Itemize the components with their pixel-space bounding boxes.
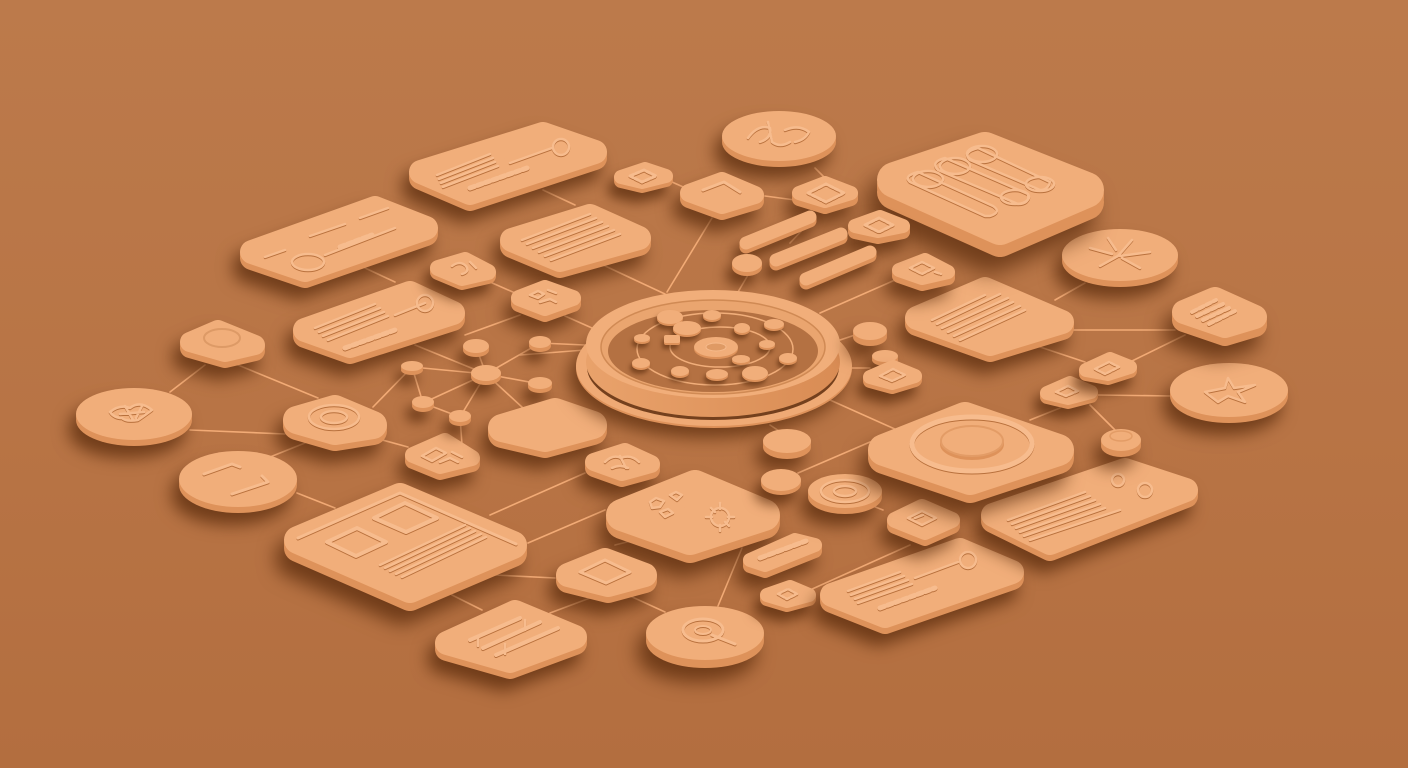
- outer ring: [576, 306, 852, 426]
- node: [529, 336, 551, 348]
- disc: below hub: [763, 429, 811, 453]
- blank rounded tile: [502, 412, 593, 438]
- card: sliders: [447, 612, 575, 661]
- tile: right pattern: [1184, 299, 1255, 326]
- small tile: near network: [413, 441, 472, 466]
- disc: right of hub 1: [853, 322, 887, 340]
- big tile: sliders: [895, 146, 1086, 227]
- small tile: bottom: [767, 587, 809, 601]
- small tile: right 2: [1086, 359, 1130, 374]
- circle tile: top: [722, 111, 836, 161]
- card: top centre: [421, 134, 595, 193]
- connector lines: [170, 168, 1185, 613]
- small tile: below blank: [594, 452, 651, 472]
- ring gap: [587, 314, 839, 420]
- main ring top: [586, 290, 840, 398]
- node: [401, 361, 423, 371]
- small tile: frame: [568, 560, 645, 585]
- card: lined right: [917, 289, 1062, 344]
- small tile: top pattern: [855, 217, 903, 232]
- hub centre: [694, 337, 738, 357]
- small tile: 1: [438, 260, 488, 278]
- small tile: right of bars: [899, 260, 948, 278]
- circle tile: at sign: [646, 606, 764, 660]
- bar 2: [776, 234, 841, 260]
- small tile: right 1: [1047, 383, 1091, 398]
- inner lip: [601, 300, 825, 394]
- big panel: squares and lines: [298, 493, 516, 589]
- disc: below hub small: [761, 469, 801, 491]
- node: [449, 410, 471, 422]
- disc: target: [808, 474, 882, 508]
- card: bottom right: [832, 550, 1012, 616]
- small tile: right of hub: [870, 367, 915, 383]
- small tile: top left of square: [621, 169, 666, 182]
- tile: concentric rings: [884, 417, 1058, 479]
- small tile: square: [895, 507, 952, 532]
- network: small nodes: [401, 336, 552, 422]
- bar 3: [806, 252, 870, 279]
- card: lined panel: [512, 214, 639, 260]
- node: [471, 365, 501, 381]
- knob: [1101, 429, 1141, 451]
- small tile: lozenge: [750, 540, 815, 565]
- circle tile: right upper: [1062, 229, 1178, 281]
- main ring side: [586, 307, 840, 417]
- card: upper left: [252, 208, 426, 270]
- circle tile: far left: [76, 388, 192, 440]
- small disc: top centre: [732, 254, 762, 272]
- circle tile: bracket: [179, 451, 297, 507]
- small tile: top left knob: [190, 329, 255, 352]
- node: [412, 396, 434, 408]
- card: lower right: [993, 470, 1186, 543]
- small tile: 2: [519, 288, 573, 308]
- central hub: [576, 290, 852, 426]
- node: [528, 377, 552, 389]
- node: [463, 339, 489, 353]
- bar 1: [746, 217, 810, 243]
- orbits: [637, 313, 793, 385]
- rounded tile: concentric: [297, 405, 373, 431]
- circle tile: far right: [1170, 363, 1288, 417]
- tile: square outline: [689, 181, 755, 205]
- tile: gears: [622, 486, 764, 539]
- floor nodes: [632, 310, 797, 380]
- small tile: under top circle: [799, 183, 851, 202]
- card: left middle: [305, 293, 453, 348]
- disc: right of hub 2: [872, 350, 898, 362]
- floor: [608, 310, 818, 392]
